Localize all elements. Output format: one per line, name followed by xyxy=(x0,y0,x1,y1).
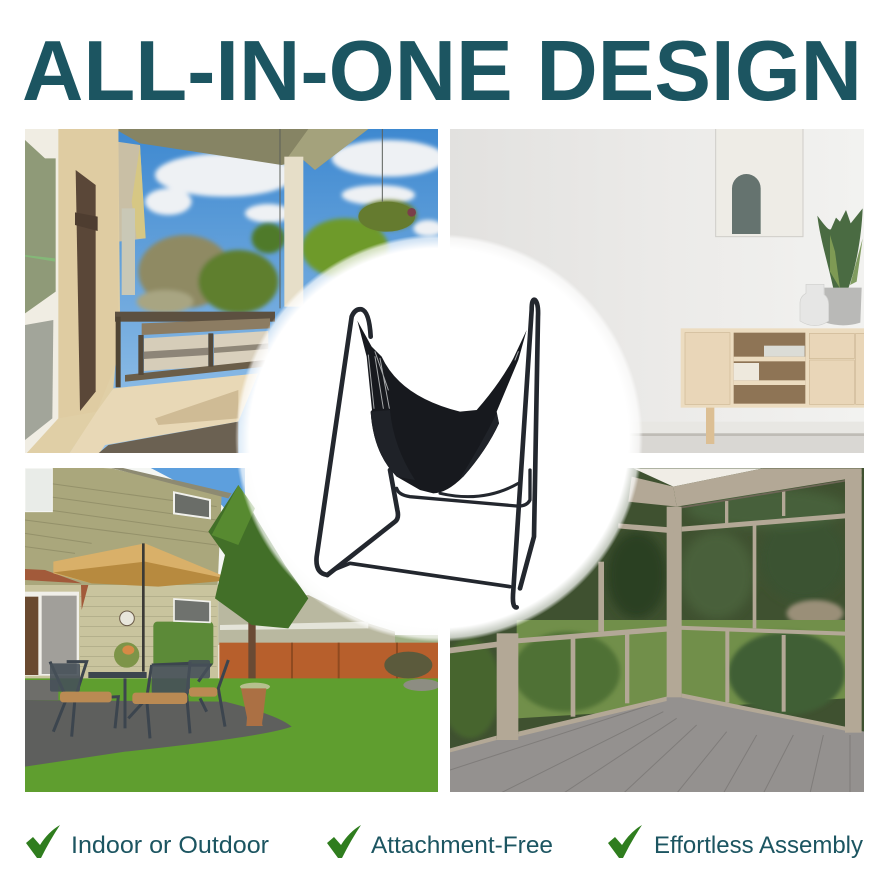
hammock strings xyxy=(368,352,518,408)
panel: backyard patio photo xyxy=(25,465,442,798)
feature: attachment-free: Attachment-Free xyxy=(371,832,553,859)
title: ALL-IN-ONE DESIGN xyxy=(22,24,862,119)
icon: check xyxy=(26,825,60,858)
sideboard xyxy=(681,328,871,444)
feature: effortless assembly: Effortless Assembly xyxy=(654,832,863,859)
stand frame xyxy=(316,300,538,607)
feature: indoor or outdoor xyxy=(26,825,269,859)
wall art xyxy=(716,125,803,237)
plant and vase xyxy=(800,208,863,326)
center white circle xyxy=(235,234,643,642)
panel: screened porch photo xyxy=(440,465,867,798)
panel: porch swing photo xyxy=(25,125,445,458)
feature: effortless assembly xyxy=(608,825,863,859)
icon: check xyxy=(608,825,642,858)
icon: check xyxy=(327,825,361,858)
feature: indoor or outdoor: Indoor or Outdoor xyxy=(71,832,269,859)
hammock seat xyxy=(357,321,527,493)
panel: interior room photo xyxy=(450,125,871,457)
product: hammock chair stand xyxy=(316,300,538,607)
feature: attachment-free xyxy=(327,825,553,859)
